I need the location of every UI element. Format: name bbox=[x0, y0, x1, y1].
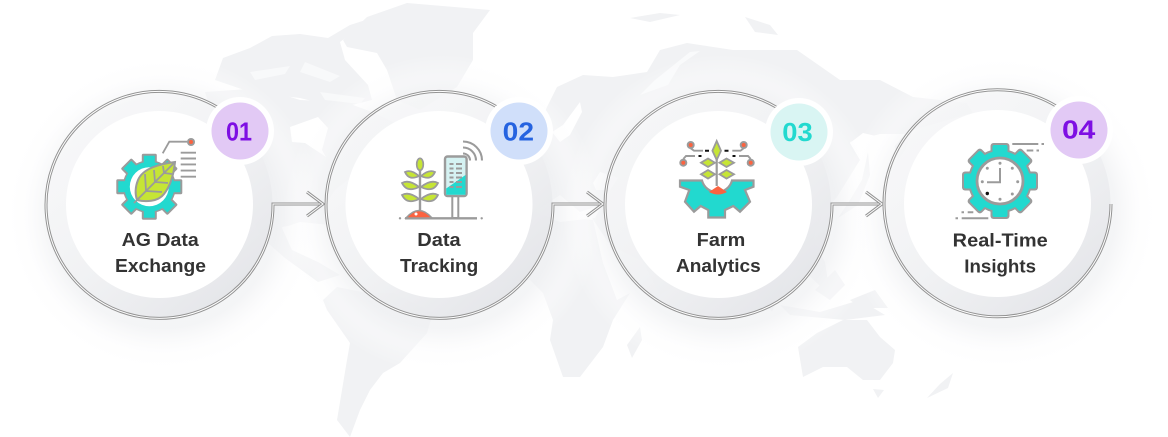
heading: AG Data Exchange bbox=[115, 230, 206, 276]
heading: AG Data Exchange: AG Data bbox=[122, 230, 200, 250]
ring shading bbox=[605, 91, 831, 317]
map: Japan bbox=[838, 152, 870, 218]
badge 01: 01 bbox=[226, 117, 252, 147]
ring with arrow bbox=[46, 91, 323, 318]
ring bbox=[884, 90, 1111, 317]
panel: step 2 Data Tracking bbox=[326, 91, 603, 318]
soft shadows below circles bbox=[3, 53, 1161, 374]
world map background bbox=[205, 3, 973, 437]
map: arctic islands bbox=[215, 18, 372, 108]
map: Hudson Bay bbox=[290, 117, 328, 157]
badge 03: 03 bbox=[782, 117, 813, 147]
icon: plant and sensor bbox=[399, 142, 483, 220]
heading: Farm Analytics: Farm bbox=[697, 230, 745, 250]
map: inland seas bbox=[250, 51, 905, 262]
badge 03 bbox=[765, 98, 833, 166]
icon: plant in half gear bbox=[680, 141, 754, 218]
icon: gear with leaf bbox=[116, 138, 196, 220]
heading: Real-Time Insights: Insights bbox=[964, 257, 1036, 277]
heading: Farm Analytics bbox=[676, 230, 761, 276]
badge 04: 04 bbox=[1062, 114, 1096, 144]
ring shading bbox=[884, 90, 1110, 316]
map: Madagascar bbox=[627, 327, 642, 358]
white disc bbox=[904, 110, 1091, 297]
map: channels bbox=[250, 62, 365, 104]
heading: Real-Time Insights bbox=[953, 231, 1048, 277]
white disc bbox=[66, 111, 253, 298]
map: South America bbox=[323, 287, 433, 437]
heading: Real-Time Insights: Real-Time bbox=[953, 231, 1048, 251]
map: Baltic and Nordic seas bbox=[552, 102, 582, 142]
map: Tasmania bbox=[873, 389, 884, 398]
ring with arrow bbox=[605, 91, 882, 318]
badge 02: 02 bbox=[503, 117, 534, 147]
map: Australia bbox=[798, 320, 895, 380]
badge 04 bbox=[1045, 96, 1113, 164]
panel: step 4 Real-Time Insights bbox=[884, 90, 1113, 317]
heading: Data Tracking: Data bbox=[417, 230, 462, 250]
heading: Data Tracking bbox=[400, 230, 478, 276]
map: Sea of Okhotsk bbox=[850, 134, 905, 160]
map: Greenland bbox=[343, 3, 490, 110]
map: Mediterranean bbox=[535, 195, 603, 222]
icon: clock gear bbox=[956, 143, 1044, 219]
map: North America bbox=[205, 88, 400, 282]
map: Arctic Russia islands bbox=[630, 13, 778, 35]
ring shading bbox=[46, 91, 272, 317]
heading: Data Tracking: Tracking bbox=[400, 256, 478, 276]
map: Gulf of Mexico bbox=[282, 224, 355, 262]
white disc bbox=[625, 111, 812, 298]
ring shading bbox=[326, 91, 552, 317]
map: Africa bbox=[490, 213, 630, 377]
badge 01 bbox=[206, 97, 274, 165]
panel: step 3 Farm Analytics bbox=[605, 91, 882, 318]
badge 02 bbox=[485, 97, 553, 165]
map: Arctic gulfs bbox=[640, 51, 700, 95]
map: Eurasia bbox=[525, 43, 973, 312]
ring with arrow bbox=[326, 91, 603, 318]
panel: step 1 AG Data Exchange bbox=[46, 91, 323, 318]
map: New Zealand bbox=[927, 373, 953, 398]
heading: Farm Analytics: Analytics bbox=[676, 256, 761, 276]
white disc bbox=[346, 111, 532, 298]
map: Indonesia bbox=[780, 270, 888, 320]
map: Black Sea bbox=[593, 172, 618, 190]
heading: AG Data Exchange: Exchange bbox=[115, 256, 206, 276]
